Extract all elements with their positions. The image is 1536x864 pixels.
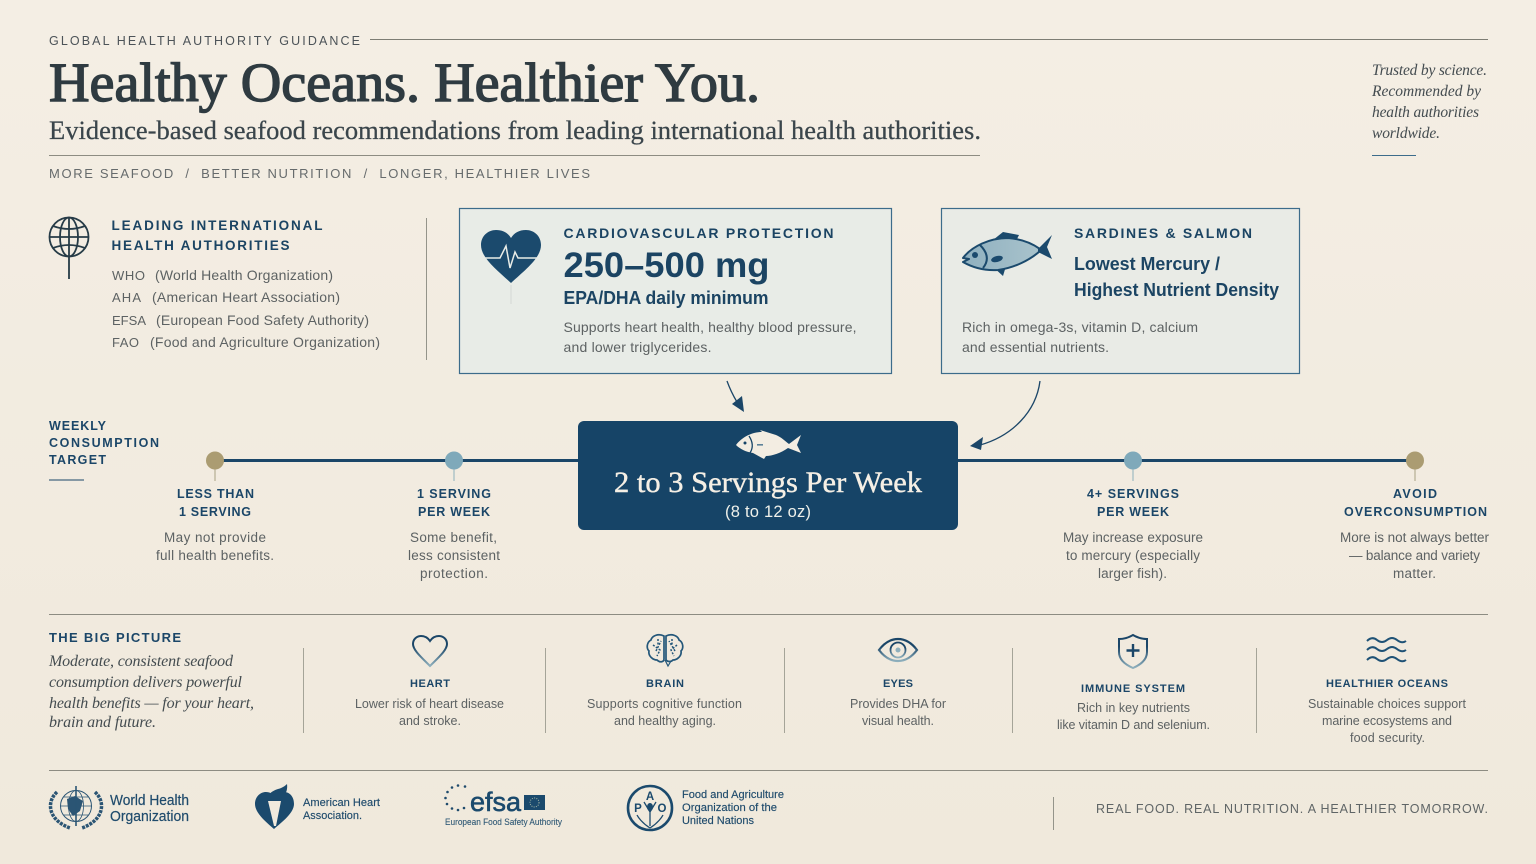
dose: 250–500 mg	[564, 246, 770, 285]
logo: FAO	[628, 786, 784, 830]
icon: waves	[1367, 638, 1406, 661]
benefit: healthier oceans: HEALTHIER OCEANS	[1326, 678, 1448, 690]
timeline: 4+ servings per week	[1063, 452, 1203, 581]
the big picture: Moderate, consistent seafood	[48, 653, 234, 670]
benefit: immune system	[1057, 635, 1210, 732]
emblem	[50, 786, 102, 828]
benefit: brain: and healthy aging.	[614, 714, 716, 728]
emblem	[255, 784, 294, 829]
benefit: healthier oceans	[1308, 638, 1467, 745]
side quote: Trusted by science.	[1372, 62, 1487, 79]
the big picture: brain and future.	[49, 714, 156, 731]
description: and lower triglycerides.	[564, 339, 712, 355]
timeline: avoid overconsumption	[1340, 452, 1490, 581]
authorities list	[112, 267, 380, 350]
logo: WHO	[50, 786, 189, 828]
logo: FAO: Organization of the	[682, 802, 777, 814]
panel: sardines and salmon	[942, 208, 1300, 374]
timeline: 4+ servings per week: May increase exposure	[1063, 530, 1203, 545]
authorities heading: HEALTH AUTHORITIES	[112, 238, 290, 253]
timeline: 1 serving per week	[408, 452, 500, 581]
timeline line	[215, 459, 1415, 462]
icon: heart outline	[413, 636, 447, 666]
benefit: brain: BRAIN	[646, 678, 684, 690]
timeline: 4+ servings per week: larger fish).	[1098, 566, 1167, 581]
timeline: 1 serving per week: 1 SERVING	[417, 487, 491, 501]
eyebrow: GLOBAL HEALTH AUTHORITY GUIDANCE	[49, 34, 360, 48]
weekly target label	[49, 419, 159, 480]
logo: EFSA: European Food Safety Authority	[445, 817, 562, 827]
logo: WHO: World Health	[110, 792, 189, 809]
the big picture: health benefits — for your heart,	[49, 695, 254, 712]
timeline: 1 serving per week: protection.	[420, 566, 488, 581]
benefit: brain: Supports cognitive function	[587, 697, 742, 711]
dotted ring	[444, 784, 466, 811]
icon: shield	[1119, 635, 1147, 668]
benefit: healthier oceans: marine ecosystems and	[1322, 714, 1452, 728]
icon: eye	[879, 639, 917, 661]
benefit: healthier oceans: Sustainable choices support	[1308, 697, 1467, 711]
target amount: (8 to 12 oz)	[725, 503, 811, 521]
icon: brain	[647, 635, 683, 666]
authorities list: (World Health Organization)	[155, 267, 333, 283]
heading: CARDIOVASCULAR PROTECTION	[564, 225, 834, 241]
side quote: health authorities	[1372, 104, 1479, 121]
description: Rich in omega-3s, vitamin D, calcium	[962, 319, 1198, 335]
target headline: 2 to 3 Servings Per Week	[614, 466, 922, 499]
the big picture: consumption delivers powerful	[49, 674, 243, 691]
timeline: less than 1 serving: full health benefits.	[156, 548, 274, 563]
target box	[578, 421, 958, 530]
authorities list: FAO	[112, 335, 139, 350]
title: Healthy Oceans. Healthier You.	[49, 52, 760, 113]
benefit: heart: HEART	[410, 678, 450, 690]
icon: heart with pulse	[481, 230, 541, 304]
logo: EFSA	[444, 784, 562, 827]
logo: FAO: United Nations	[682, 815, 754, 827]
logo: American Heart Association: Association.	[303, 810, 362, 822]
authorities list: EFSA	[112, 313, 146, 328]
benefit: eyes: visual health.	[862, 714, 934, 728]
header	[49, 34, 1488, 181]
closing tagline: REAL FOOD. REAL NUTRITION. A HEALTHIER TOMORROW.	[1096, 802, 1488, 816]
description: and essential nutrients.	[962, 339, 1109, 355]
panel: cardiovascular protection	[460, 208, 892, 374]
benefit: immune system: like vitamin D and selenium.	[1057, 718, 1210, 732]
timeline: less than 1 serving: LESS THAN	[177, 487, 254, 501]
logo: American Heart Association: American Heart	[303, 797, 380, 809]
authorities list: WHO	[112, 268, 145, 283]
authorities heading: LEADING INTERNATIONAL	[112, 218, 322, 233]
the big picture: THE BIG PICTURE	[49, 630, 181, 645]
benefit: healthier oceans: food security.	[1350, 731, 1425, 745]
heading: SARDINES & SALMON	[1074, 225, 1252, 241]
timeline: 4+ servings per week: to mercury (especially	[1066, 548, 1200, 563]
benefit: heart: and stroke.	[399, 714, 461, 728]
benefit: heart: Lower risk of heart disease	[355, 697, 504, 711]
benefit: eyes: EYES	[883, 678, 913, 690]
arrow: sardines to target	[970, 381, 1040, 450]
timeline: avoid overconsumption: matter.	[1393, 566, 1436, 581]
timeline: avoid overconsumption: AVOID	[1393, 487, 1437, 501]
timeline: avoid overconsumption: — balance and variety	[1349, 548, 1480, 563]
benefit: brain	[587, 635, 742, 728]
claim: Highest Nutrient Density	[1074, 280, 1279, 300]
logo: WHO: Organization	[110, 808, 189, 825]
timeline: less than 1 serving: May not provide	[164, 530, 266, 545]
benefit: immune system: Rich in key nutrients	[1077, 701, 1190, 715]
benefit: immune system: IMMUNE SYSTEM	[1081, 683, 1185, 695]
icon: white fish	[736, 430, 801, 459]
emblem	[628, 786, 672, 830]
authorities list: AHA	[112, 290, 141, 305]
benefit: eyes: Provides DHA for	[850, 697, 946, 711]
emblem: O	[658, 803, 667, 815]
side quote: Recommended by	[1371, 83, 1481, 100]
claim	[1074, 254, 1279, 300]
authorities heading	[112, 218, 322, 253]
side quote	[1371, 62, 1487, 156]
subtitle: Evidence-based seafood recommendations from leading international health authorities.	[49, 115, 981, 145]
authorities list: (American Heart Association)	[152, 289, 340, 305]
logo: EFSA: efsa	[470, 787, 522, 817]
authorities list: (Food and Agriculture Organization)	[150, 334, 380, 350]
timeline: 4+ servings per week: 4+ SERVINGS	[1087, 487, 1179, 501]
timeline: 1 serving per week: PER WEEK	[418, 505, 490, 519]
timeline: 4+ servings per week: PER WEEK	[1097, 505, 1169, 519]
benefit: eyes	[850, 639, 946, 728]
icon: fish	[963, 232, 1052, 276]
EU flag	[524, 795, 545, 810]
tagline: MORE SEAFOOD / BETTER NUTRITION / LONGER, HEALTHIER LIVES	[49, 166, 590, 181]
authorities list: (European Food Safety Authority)	[156, 312, 369, 328]
timeline: 1 serving per week: less consistent	[408, 548, 500, 563]
timeline: less than 1 serving	[156, 452, 274, 563]
panel: leading authorities	[50, 217, 380, 350]
dose label: EPA/DHA daily minimum	[564, 288, 768, 308]
icon: globe	[50, 217, 88, 279]
emblem: A	[646, 791, 654, 803]
description	[962, 319, 1198, 355]
weekly target label: TARGET	[49, 453, 106, 467]
benefit: heart	[355, 636, 504, 728]
claim: Lowest Mercury /	[1074, 254, 1220, 274]
timeline: avoid overconsumption: More is not always better	[1340, 530, 1490, 545]
arrow: cardiovascular to target	[727, 381, 744, 412]
logo: American Heart Association	[255, 784, 380, 829]
timeline: 1 serving per week: Some benefit,	[410, 530, 497, 545]
description	[564, 319, 856, 355]
emblem: P	[634, 803, 642, 815]
side quote: worldwide.	[1372, 125, 1440, 142]
weekly target label: WEEKLY	[49, 419, 107, 433]
timeline: less than 1 serving: 1 SERVING	[179, 505, 251, 519]
timeline: avoid overconsumption: OVERCONSUMPTION	[1344, 505, 1487, 519]
logo: FAO: Food and Agriculture	[682, 789, 784, 801]
the big picture	[48, 630, 254, 731]
weekly target label: CONSUMPTION	[49, 436, 159, 450]
description: Supports heart health, healthy blood pressure,	[564, 319, 856, 335]
